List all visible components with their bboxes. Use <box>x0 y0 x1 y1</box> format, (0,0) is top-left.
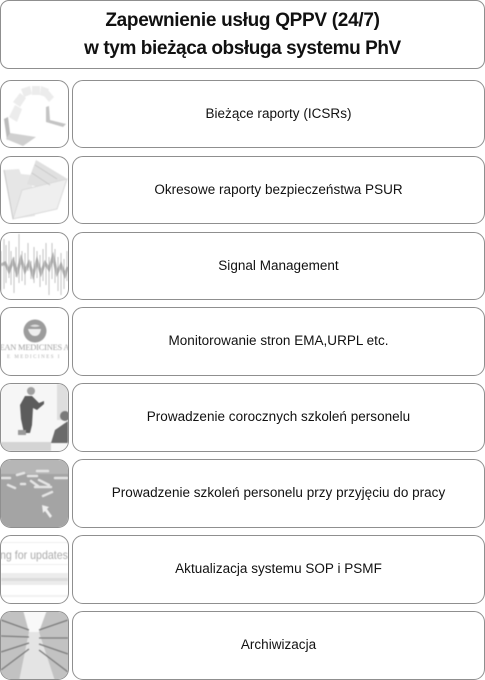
text: website monitoring: Monitorowanie stron EMA,URPL etc. <box>168 333 388 348</box>
icon: document folder <box>0 156 69 224</box>
title <box>0 0 485 69</box>
title: w tym bieżąca obsługa systemu PhV <box>84 38 401 58</box>
icon: trainer at whiteboard <box>0 383 69 452</box>
icon: signal waveform <box>0 232 69 300</box>
icon: laptops exchanging documents <box>0 80 69 148</box>
text: website monitoring <box>72 307 485 376</box>
text: onboarding training: Prowadzenie szkoleń personelu przy przyjęciu do pracy <box>112 485 445 500</box>
icon: checking for updates <box>0 535 69 604</box>
text: PSUR reports: Okresowe raporty bezpieczeństwa PSUR <box>154 182 403 196</box>
title: Zapewnienie usług QPPV (24/7) <box>105 10 380 30</box>
text: current reports <box>72 80 485 148</box>
text: onboarding training <box>72 459 485 528</box>
icon: EMA logo <box>0 307 69 376</box>
text: PSUR reports <box>72 156 485 224</box>
icon: flock with arrow <box>0 459 69 528</box>
text: current reports: Bieżące raporty (ICSRs) <box>205 106 352 120</box>
text: annual training <box>72 383 485 452</box>
text: SOP and PSMF update <box>72 535 485 604</box>
text: SOP and PSMF update: Aktualizacja systemu SOP i PSMF <box>175 561 382 576</box>
icon: archive corridor <box>0 611 69 680</box>
text: archiving <box>72 611 485 680</box>
text: archiving: Archiwizacja <box>241 637 316 652</box>
icon: EMA logo: E MEDICINES I <box>7 355 61 360</box>
text: signal management <box>72 232 485 300</box>
text: annual training: Prowadzenie corocznych szkoleń personelu <box>147 409 410 424</box>
text: signal management: Signal Management <box>218 258 339 272</box>
